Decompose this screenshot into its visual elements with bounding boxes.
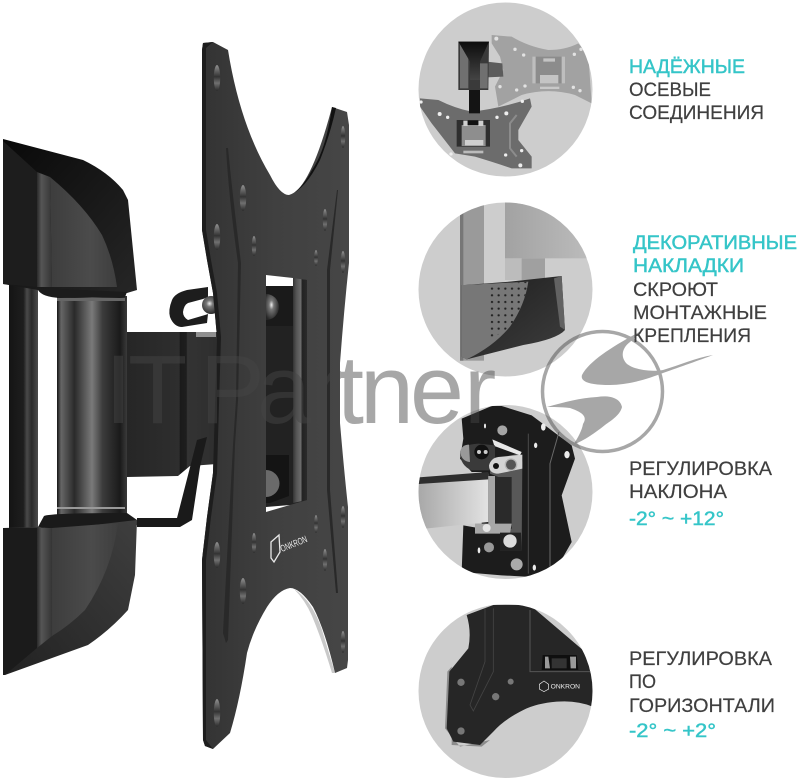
window edge (530, 610, 593, 672)
product: VESA plate (202, 42, 349, 749)
left dark face (3, 528, 37, 675)
window lower white gap (266, 505, 290, 512)
text: horizontal adjustment: -2° ~ +2° (629, 721, 716, 742)
panel: axial joints photo (418, 2, 592, 176)
lower ball (266, 470, 280, 497)
text: tilt adjustment: РЕГУЛИРОВКА (629, 459, 772, 480)
watermark: IT Partner (105, 330, 713, 452)
logo: ONKRON (551, 685, 580, 691)
cover ribbed edge (554, 276, 565, 330)
panel: tilt adjustment photo (418, 405, 592, 582)
black plate (447, 605, 593, 745)
upper bracket in window (266, 286, 293, 326)
plate ridge (470, 608, 493, 711)
text: decorative covers: НАКЛАДКИ (633, 256, 744, 277)
watermark lower swoosh (547, 396, 622, 445)
tilt bracket (137, 437, 207, 527)
arm top edge (418, 472, 488, 484)
curved front panel (50, 177, 117, 287)
text: decorative covers (633, 233, 797, 347)
text: axial joints: СОЕДИНЕНИЯ (629, 103, 764, 124)
white tip (492, 439, 522, 455)
plate holes (478, 423, 570, 571)
wall rod (460, 202, 484, 361)
light plate (492, 35, 592, 107)
dark plate (420, 98, 532, 168)
panel: decorative cover photo (418, 202, 593, 376)
top decorative cover (3, 139, 137, 301)
watermark upper swoosh (582, 330, 713, 385)
upper ball (266, 294, 279, 320)
bracket nut (196, 332, 216, 337)
logo (539, 681, 580, 692)
logo: ONKRON: ONKRON (279, 534, 309, 555)
cover body (462, 276, 565, 359)
panel: horizontal adjustment photo (418, 604, 593, 778)
cover (458, 42, 489, 90)
bracket (542, 655, 578, 670)
disc (418, 202, 592, 376)
disc (418, 604, 592, 778)
strip (37, 172, 52, 287)
bracket inner (495, 476, 512, 524)
cover body (3, 520, 137, 675)
window (266, 275, 307, 512)
disc (418, 2, 592, 176)
pivot loop (169, 287, 208, 327)
rod (488, 476, 495, 524)
lower white notch (490, 579, 515, 582)
plate edge highlight (202, 42, 221, 749)
cylinder ring (57, 298, 125, 301)
strip (37, 528, 52, 648)
light plate dots (494, 37, 583, 92)
text: axial joints: ОСЕВЫЕ (629, 80, 711, 101)
lower notch light edge (294, 589, 335, 673)
upper pivot (460, 444, 495, 470)
arm box (127, 332, 217, 477)
cap above cover (38, 513, 137, 530)
text: axial joints: НАДЁЖНЫЕ (629, 57, 745, 78)
round bolt (500, 533, 522, 550)
connecting arm (487, 62, 503, 77)
nuts (484, 542, 494, 552)
cap below cover (38, 288, 127, 298)
lower clamp (475, 524, 512, 534)
dotted panel (462, 282, 528, 359)
black plate (460, 406, 575, 577)
wide wall panel (505, 202, 593, 258)
watermark ring (542, 332, 662, 452)
plate inner edge (528, 434, 529, 574)
watermark: IT Partner: IT Partner (105, 335, 496, 444)
grey arm (418, 474, 488, 529)
left dark face (3, 141, 37, 287)
logo: ONKRON (271, 534, 309, 562)
text: horizontal adjustment (629, 649, 775, 742)
text: decorative covers: КРЕПЛЕНИЯ (633, 326, 751, 347)
dark plate window (457, 120, 490, 147)
swivel cylinder (57, 296, 127, 516)
metal bracket (490, 454, 522, 550)
holes (457, 679, 514, 735)
bottom decorative cover (3, 507, 137, 675)
plate shadow (445, 667, 490, 747)
arm post (469, 90, 480, 114)
dark plate ridge (510, 115, 517, 157)
adjustment plate (489, 455, 522, 474)
plate brand marks (463, 151, 483, 153)
pivot bolt (202, 296, 220, 314)
window frame (293, 278, 307, 503)
plate ridge (550, 432, 559, 572)
plate dots (419, 100, 524, 167)
text: axial joints (629, 57, 764, 124)
disc (418, 405, 592, 579)
text: horizontal adjustment: РЕГУЛИРОВКА (629, 649, 772, 670)
text: horizontal adjustment: ПО (629, 672, 656, 693)
stub (522, 258, 545, 280)
text: tilt adjustment: НАКЛОНА (629, 482, 727, 503)
text: horizontal adjustment: ГОРИЗОНТАЛИ (629, 696, 775, 717)
curved front panel (52, 523, 118, 636)
text: tilt adjustment: -2° ~ +12° (629, 509, 724, 530)
text: tilt adjustment (629, 459, 772, 530)
wall rod (9, 283, 38, 531)
mounting holes (214, 65, 345, 727)
right ridge (327, 190, 338, 593)
left ridge (223, 148, 241, 643)
text: decorative covers: ДЕКОРАТИВНЫЕ (633, 233, 797, 254)
text: decorative covers: СКРОЮТ (633, 280, 718, 301)
text: decorative covers: МОНТАЖНЫЕ (633, 303, 767, 324)
plate body (202, 42, 349, 749)
window upper white gap (266, 275, 293, 287)
light plate window (532, 57, 565, 83)
upper notch dark edge (289, 107, 336, 195)
product: wall mount arm assembly (3, 139, 220, 675)
lower bracket in window (266, 455, 289, 503)
